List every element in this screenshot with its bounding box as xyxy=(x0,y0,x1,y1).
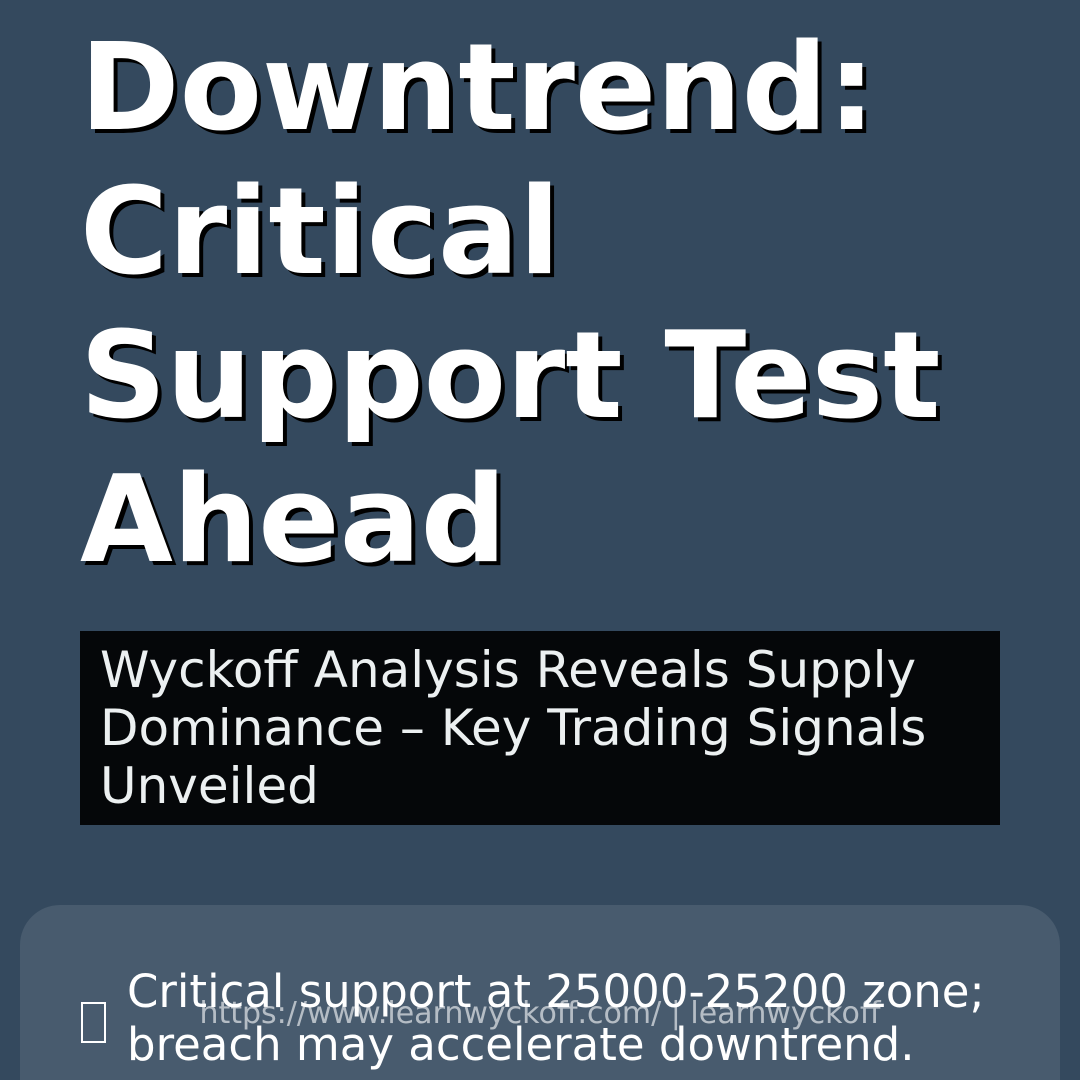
title: Ahead xyxy=(80,451,507,590)
footer source line: https://www.learnwyckoff.com/ | learnwyckoff xyxy=(199,996,881,1031)
title: Downtrend: xyxy=(80,19,876,158)
subtitle banner: Wyckoff Analysis Reveals Supply Dominance – Key Trading Signals Unveiled xyxy=(100,641,926,815)
title: Support Test xyxy=(80,307,941,446)
icon: missing glyph box xyxy=(81,1002,106,1043)
key point text: Critical support at 25000-25200 zone; breach may accelerate downtrend. xyxy=(127,965,985,1071)
panel: key point card xyxy=(20,905,1060,1080)
title: Critical xyxy=(80,163,560,302)
title xyxy=(80,19,942,590)
